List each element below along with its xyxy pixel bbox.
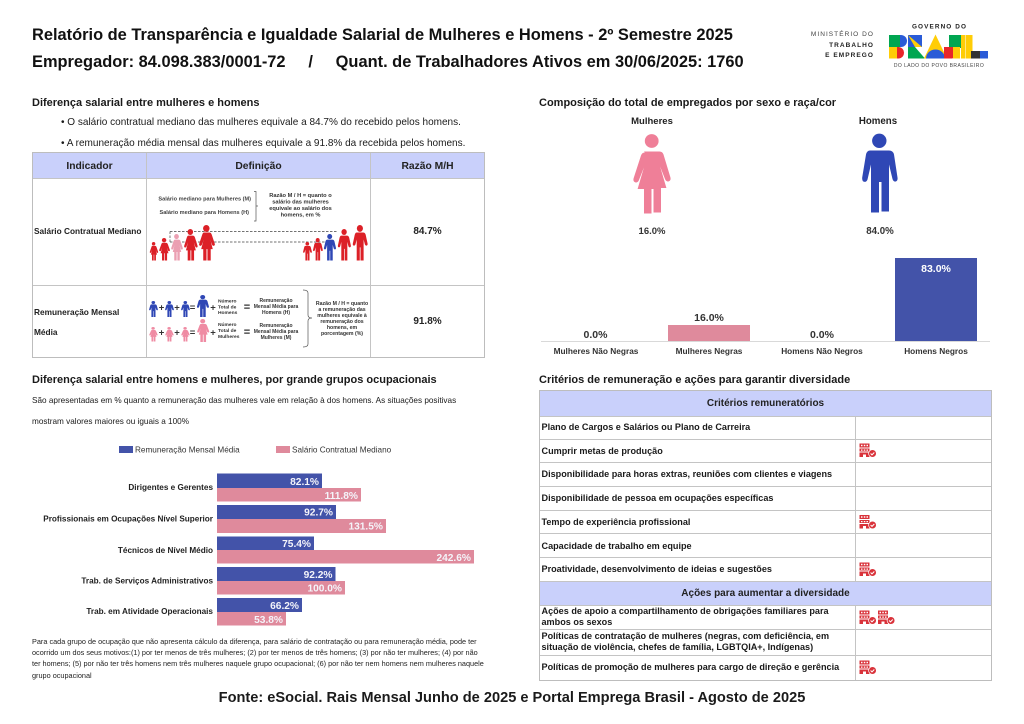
diagram: salário mediano: Razão M / H = quanto o [269,193,332,199]
diagram: remuneração média: Mensal Média para [254,304,298,310]
bar chart: grupos ocupacionais: 242.6% [436,553,471,564]
bar chart: raça/cor: Homens Negros [904,346,968,356]
diagram: remuneração média: mulheres equivale à [317,313,367,319]
bar chart: grupos ocupacionais: 100.0% [307,584,342,594]
label: Mulheres: Mulheres [631,116,673,127]
bar chart: raça/cor: Mulheres Não Negras [554,346,639,356]
text: explicação: São apresentadas em % quanto a remuneração das mulheres vale em relação à dos homens. As situações positivas [32,396,456,405]
column: Indicador: Indicador [66,161,113,172]
bar chart: grupos ocupacionais: Trab. de Serviços Administrativos [81,576,213,586]
row label: Remuneração Mensal Média: Remuneração Mensal [34,307,119,317]
text: explicação [32,396,456,426]
value: 84.0% [866,226,894,236]
logo: Ministério do Trabalho e Emprego [811,30,874,59]
row label: Remuneração Mensal Média [34,307,119,337]
row: Cumprir metas de produção [542,446,663,456]
bar chart: raça/cor [541,258,990,356]
diagram: remuneração média: Remuneração [259,298,293,304]
bar chart: raça/cor: 0.0% [584,329,608,341]
logo: Governo do Brasil [889,23,988,69]
diagram: remuneração média: Mulheres [218,334,240,340]
diagram: remuneração média: + [210,328,216,338]
table header [33,153,484,178]
diagram: remuneração média: = [244,302,250,314]
legend [119,446,392,454]
header: critérios remuneratórios: Critérios remuneratórios [707,398,824,409]
diagram: remuneração média: Número [218,298,236,304]
diagram: remuneração média: = [190,328,196,338]
diagram: remuneração média: Mulheres (M) [261,335,292,341]
row: Políticas de promoção de mulheres para cargo de direção e gerência [542,662,839,672]
diagram: remuneração média: homens, em [327,325,358,331]
header: critérios remuneratórios [540,391,991,416]
bar chart: grupos ocupacionais: Dirigentes e Gerentes [128,483,213,492]
row label: Salário Contratual Mediano: Salário Contratual Mediano [34,226,141,236]
text: nota de rodapé: grupo ocupacional [32,671,92,680]
diagram: remuneração média: Total de [218,328,237,334]
heading: grupos ocupacionais: Diferença salarial entre homens e mulheres, por grande grupos ocupacionais [32,374,437,386]
diagram: remuneração média: Remuneração [259,323,293,329]
heading: critérios: Critérios de remuneração e ações para garantir diversidade [539,374,850,386]
diagram: remuneração média [149,290,368,348]
diagram: remuneração média: + [210,302,216,314]
text: bullet points: • O salário contratual mediano das mulheres equivale a 84.7% do recebido pelos homens. [61,117,461,128]
row: Plano de Cargos e Salários ou Plano de Carreira [542,422,750,432]
legend: Salário Contratual Mediano [292,446,392,454]
diagram: remuneração média: remuneração dos [320,319,364,325]
row: Disponibilidade para horas extras, reuniões com clientes e viagens [542,469,832,479]
diagram: salário mediano: Salário mediano para Mulheres (M) [158,196,251,202]
diagram: remuneração média: Homens (H) [262,310,290,316]
figure: Mulheres 16.0% [631,116,673,236]
value: 91.8%: 91.8% [413,316,442,327]
diagram: salário mediano: equivale ao salário dos [269,206,332,212]
diagram: remuneração média: Homens [218,310,238,316]
diagram: remuneração média: Razão M / H = quanto [316,301,368,307]
panel: critérios table [539,390,992,681]
bar chart: grupos ocupacionais: 92.7% [304,508,333,518]
icon: man [862,134,898,212]
bar chart: grupos ocupacionais: 75.4% [282,539,311,550]
diagram: salário mediano: salário das mulheres [272,200,329,206]
diagram: remuneração média: a remuneração das [318,307,366,313]
header: ações [540,581,991,605]
icon: woman [633,134,671,214]
bar chart: raça/cor: 16.0% [694,312,725,324]
text: nota de rodapé: ocorrido um dos seus motivos:(1) por ter menos de três mulheres; (2) por ter menos de três homens; (3) por não ter mulheres; (4) por não [32,648,478,657]
heading: composição: Composição do total de empregados por sexo e raça/cor [539,96,836,108]
diagram: salário mediano [150,191,368,260]
bar chart: grupos ocupacionais: 82.1% [290,477,319,488]
row: Disponibilidade de pessoa em ocupações específicas [542,493,773,503]
bar chart: raça/cor: Homens Não Negros [781,346,863,356]
bar chart: grupos ocupacionais: 66.2% [270,601,299,612]
title: Relatório de Transparência e Igualdade Salarial de Mulheres e Homens - 2º Semestre 2025 [32,26,733,44]
figure: Homens 84.0% [859,116,898,236]
logo: Ministério do Trabalho e Emprego: MINISTÉRIO DO [811,31,874,38]
bar chart: raça/cor: 83.0% [921,263,952,275]
bar chart: grupos ocupacionais: 92.2% [304,570,332,581]
bar chart: grupos ocupacionais: 53.8% [254,615,283,626]
column: Razão M/H: Razão M/H [401,161,454,172]
diagram: remuneração média: Mensal Média para [254,329,298,335]
bar chart: grupos ocupacionais: Técnicos de Nível Médio [118,546,213,555]
title: Empregador: 84.098.383/0001-72 / Quant. de Trabalhadores Ativos em 30/06/2025: 1760 [32,52,744,70]
text: nota de rodapé: Para cada grupo de ocupação que não apresenta cálculo da diferença, para salário de contratação ou para remuneração média, pode ter [32,637,477,646]
row: Ações de apoio a compartilhamento de obrigações familiares para ambos os sexos [542,606,829,627]
diagram: remuneração média: porcentagem (%) [321,331,363,337]
diagram: remuneração média: + [174,302,180,314]
text: explicação: mostram valores maiores ou iguais a 100% [32,417,189,426]
label: Homens: Homens [859,116,897,127]
diagram: remuneração média: = [244,326,250,338]
bar chart: raça/cor: 0.0% [810,329,835,341]
bar chart: raça/cor: Mulheres Negras [676,346,743,356]
bar chart: grupos ocupacionais: 111.8% [325,491,358,502]
bar chart: grupos ocupacionais: 131.5% [348,522,383,532]
diagram: remuneração média: Total de [218,304,237,310]
legend: Remuneração Mensal Média [135,446,240,454]
column: Definição: Definição [235,161,282,172]
diagram: remuneração média: + [159,328,165,338]
panel: indicator table [32,152,485,358]
bar chart: grupos ocupacionais [43,474,474,626]
row: Tempo de experiência profissional [542,517,690,527]
title [32,26,744,70]
logo: Ministério do Trabalho e Emprego: TRABALHO [829,42,874,48]
diagram: remuneração média: Número [218,322,236,328]
source: Fonte: eSocial. Rais Mensal Junho de 2025 e Portal Emprega Brasil - Agosto de 2025 [219,690,805,706]
bar chart: grupos ocupacionais: Trab. em Atividade Operacionais [86,607,213,616]
row: Políticas de contratação de mulheres (negras, com deficiência, em situação de violência, chefes de família, LGBTQIA+, Indígenas) [542,631,829,652]
logo: Governo do Brasil: DO LADO DO POVO BRASILEIRO [894,63,984,69]
logo: Governo do Brasil: GOVERNO DO [912,23,967,30]
icons: check building [860,444,894,674]
text: bullet points [61,117,465,148]
row label: Remuneração Mensal Média: Média [34,327,58,337]
row: Capacidade de trabalho em equipe [542,541,692,551]
bar chart: grupos ocupacionais: Profissionais em Ocupações Nível Superior [43,514,214,524]
logo: Ministério do Trabalho e Emprego: E EMPREGO [825,52,874,59]
diagram: remuneração média: + [159,302,165,314]
diagram: remuneração média: + [174,328,180,338]
bar: Homens Negros [895,258,977,341]
row: Proatividade, desenvolvimento de ideias e sugestões [542,564,772,574]
text: nota de rodapé [32,637,484,680]
text: bullet points: • A remuneração média mensal das mulheres equivale a 91.8% da recebida pelos homens. [61,138,465,148]
heading: diferença salarial: Diferença salarial entre mulheres e homens [32,96,259,108]
value: 16.0% [639,226,665,236]
diagram: salário mediano: Salário mediano para Homens (H) [159,210,249,216]
diagram: remuneração média: = [190,302,196,314]
text: nota de rodapé: ter homens; (5) por não ter três homens nem três mulheres naquele grupo ocupacional; (6) por não ter nem homens nem mulheres naquele [32,659,484,668]
value: 84.7%: 84.7% [413,226,442,237]
bar: Mulheres Negras [668,325,750,341]
header: ações: Ações para aumentar a diversidade [681,588,850,599]
diagram: salário mediano: homens, em % [281,212,320,218]
